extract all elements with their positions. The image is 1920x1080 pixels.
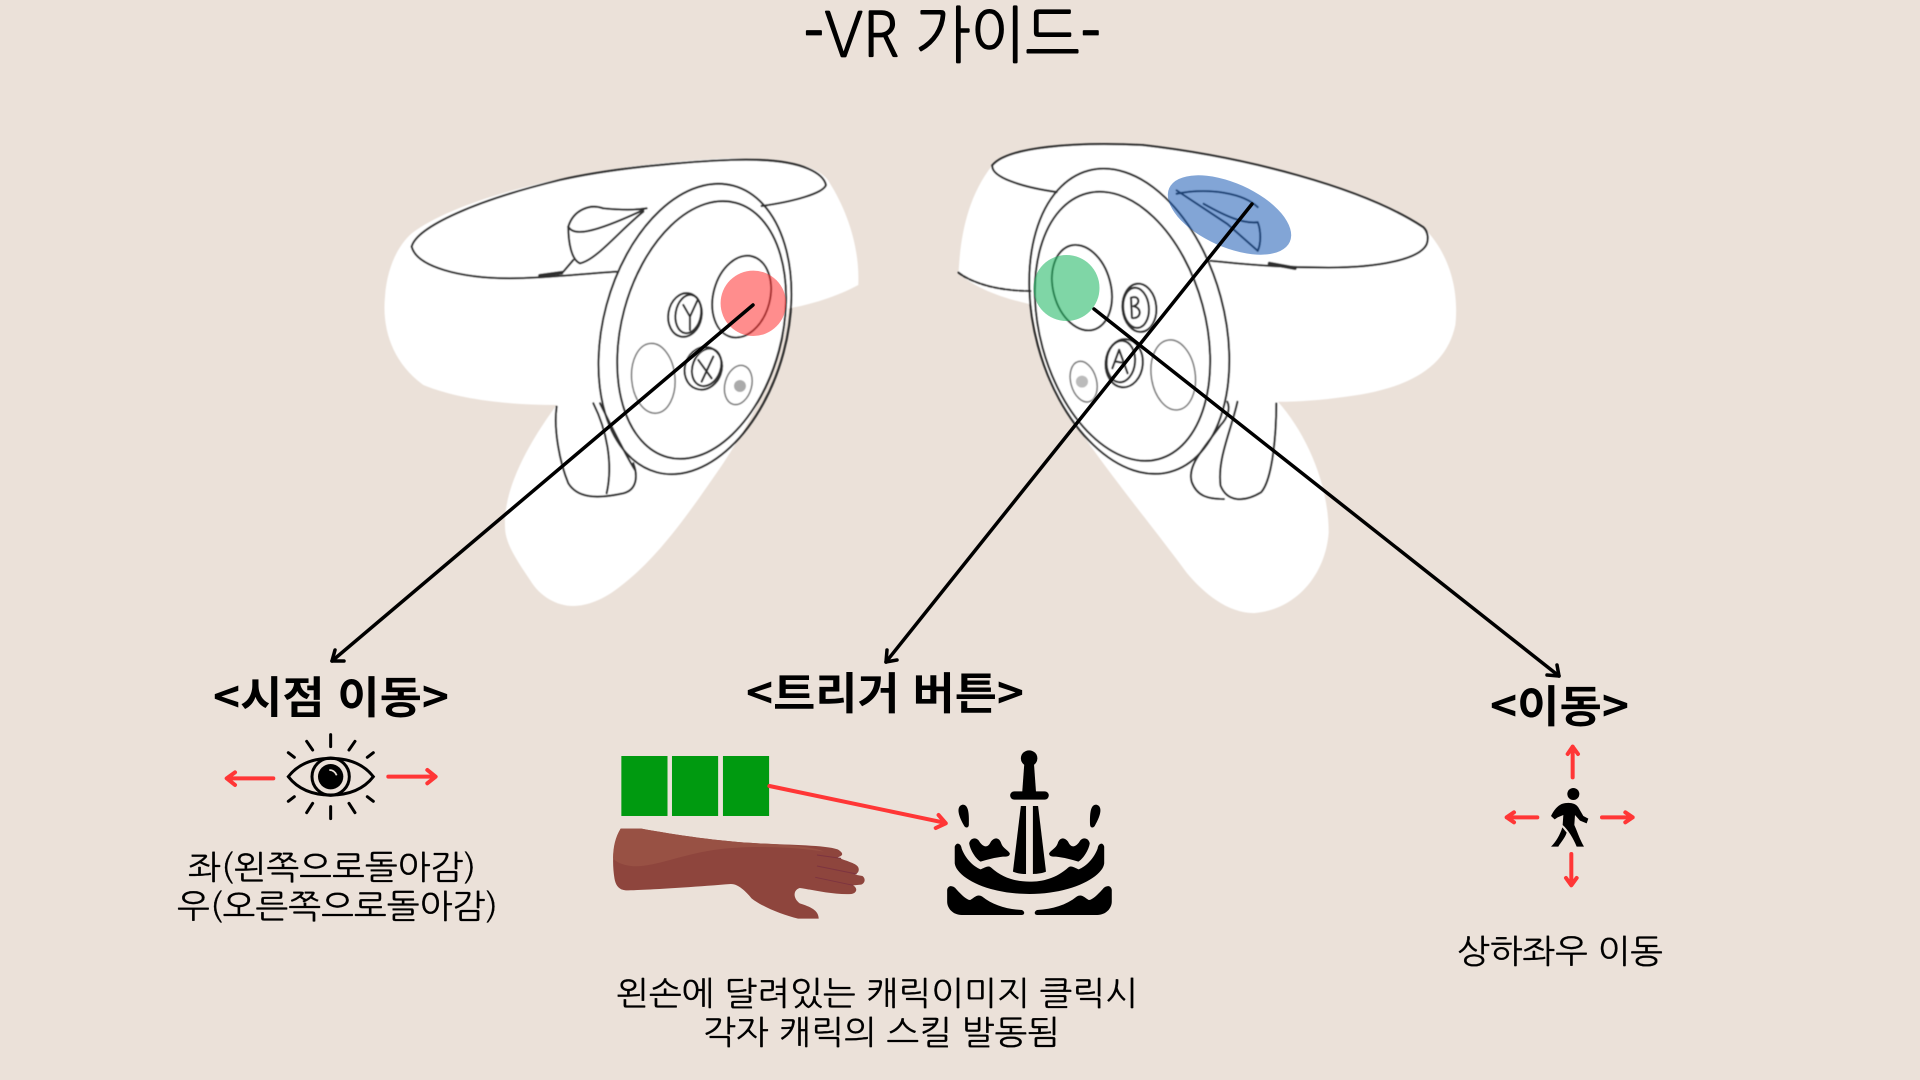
icon: eye with left and right arrows: [227, 735, 436, 819]
text: view move description: 우(오른쪽으로돌아감): [177, 890, 498, 923]
text: trigger description: [616, 977, 1138, 1049]
arrow: view stick to view-move label: [332, 305, 753, 661]
right controller: [959, 144, 1456, 613]
text: trigger description: 왼손에 달려있는 캐릭이미지 클릭시: [616, 977, 1138, 1010]
left controller: [384, 158, 858, 606]
text: trigger description: 각자 캐릭의 스킬 발동됨: [703, 1016, 1060, 1049]
text: move description: 상하좌우 이동: [1457, 935, 1663, 968]
highlight: trigger (blue): [1156, 159, 1303, 271]
group: skill bars, hand and sword icon: [613, 750, 1112, 919]
arrow: move stick to move label: [1094, 309, 1559, 676]
highlight: view stick (red): [721, 271, 786, 336]
title: -VR 가이드-: [803, 4, 1101, 66]
arrow: trigger to trigger label: [886, 204, 1252, 662]
icon: sword in splash: [947, 750, 1112, 915]
icon: walking person with four arrows: [1507, 747, 1633, 885]
arrow: bars to sword icon: [769, 786, 946, 828]
hand: [613, 829, 865, 919]
heading: move: <이동>: [1490, 671, 1629, 735]
text: view move description: 좌(왼쪽으로돌아감): [188, 851, 476, 884]
heading: view move: <시점 이동>: [213, 662, 449, 726]
text: view move description: [177, 851, 498, 923]
highlight: move stick (green): [1034, 255, 1100, 321]
heading: trigger button: <트리거 버튼>: [746, 658, 1024, 722]
skill bars: [621, 756, 769, 816]
